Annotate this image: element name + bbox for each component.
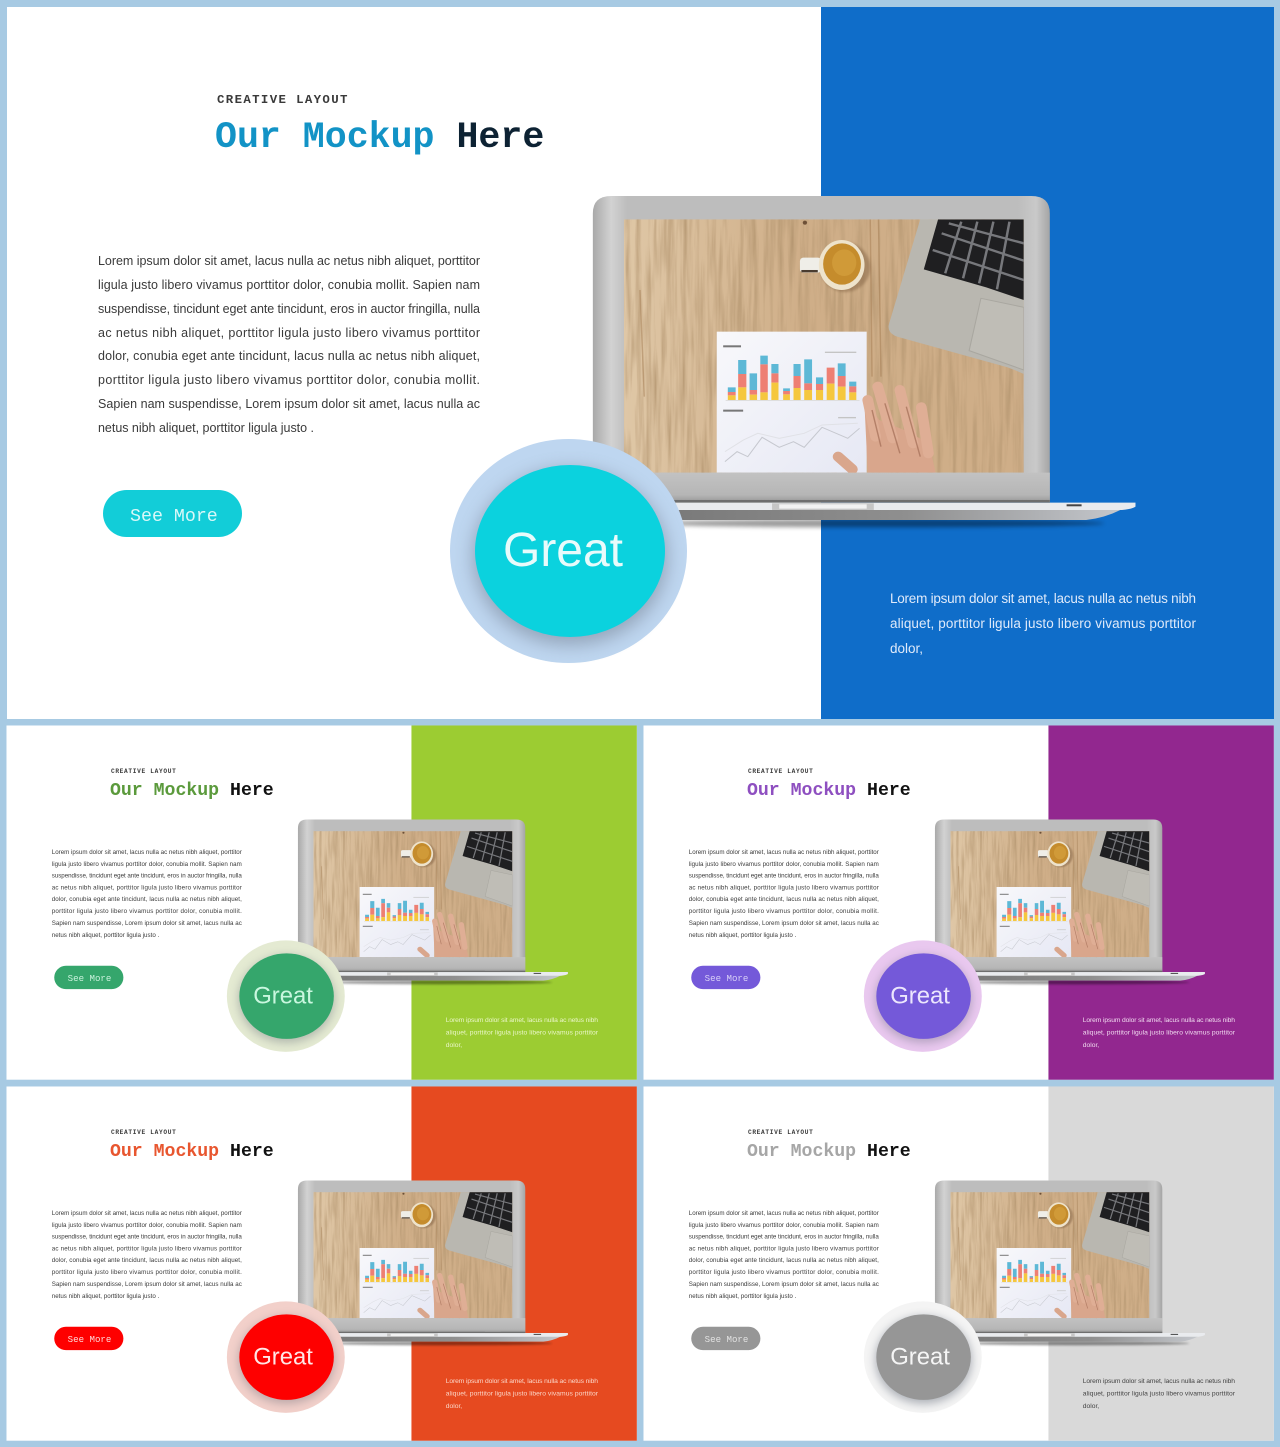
body paragraph: Lorem ipsum dolor sit amet, lacus nulla ac netus nibh aliquet, porttitor [98, 254, 480, 268]
eyebrow label: CREATIVE LAYOUT [748, 768, 813, 775]
body paragraph: ac netus nibh aliquet, porttitor ligula justo libero vivamus porttitor [689, 1246, 879, 1253]
body paragraph: ligula justo libero vivamus porttitor dolor, conubia mollit. Sapien nam [98, 278, 480, 292]
button: see more: See More [130, 507, 218, 527]
panel caption: Lorem ipsum dolor sit amet, lacus nulla ac netus nibh [1083, 1017, 1235, 1024]
panel caption: dolor, [1083, 1403, 1099, 1410]
panel caption: aliquet, porttitor ligula justo libero vivamus porttitor [446, 1390, 599, 1397]
body paragraph: Lorem ipsum dolor sit amet, lacus nulla ac netus nibh aliquet, porttitor [52, 849, 242, 856]
panel caption [1083, 1378, 1236, 1410]
body paragraph: Sapien nam suspendisse, Lorem ipsum dolor sit amet, lacus nulla ac [689, 1281, 879, 1288]
body paragraph: porttitor ligula justo libero vivamus porttitor dolor, conubia mollit. [689, 908, 879, 915]
badge: great: Great [503, 524, 623, 577]
panel caption [446, 1378, 599, 1410]
body paragraph: Sapien nam suspendisse, Lorem ipsum dolor sit amet, lacus nulla ac [689, 920, 879, 927]
laptop mockup [935, 820, 1205, 984]
button: see more [54, 1327, 123, 1350]
laptop mockup [593, 196, 1135, 527]
badge: great [450, 439, 687, 663]
body paragraph: porttitor ligula justo libero vivamus porttitor dolor, conubia mollit. [689, 1269, 879, 1276]
body paragraph: ac netus nibh aliquet, porttitor ligula justo libero vivamus porttitor [98, 326, 480, 340]
body paragraph: suspendisse, tincidunt eget ante tincidunt, eros in auctor fringilla, nulla [98, 302, 480, 316]
laptop mockup [935, 1181, 1205, 1345]
right colour panel [411, 725, 637, 1080]
panel caption: aliquet, porttitor ligula justo libero vivamus porttitor [890, 616, 1196, 631]
panel caption: aliquet, porttitor ligula justo libero vivamus porttitor [1083, 1390, 1236, 1397]
title: Our Mockup Here [110, 1142, 274, 1162]
body paragraph [689, 1210, 879, 1300]
button: see more [54, 966, 123, 989]
panel: large blue slide [7, 7, 1274, 719]
badge: great [227, 940, 345, 1052]
badge: great: Great [253, 1344, 313, 1371]
title: Our Mockup Here [110, 781, 274, 801]
laptop mockup [298, 820, 568, 984]
button: see more [691, 1327, 760, 1350]
body paragraph: ligula justo libero vivamus porttitor dolor, conubia mollit. Sapien nam [52, 861, 242, 868]
badge: great [227, 1301, 345, 1413]
eyebrow label: CREATIVE LAYOUT [217, 93, 349, 107]
eyebrow label: CREATIVE LAYOUT [748, 1129, 813, 1136]
button: see more [691, 966, 760, 989]
body paragraph: ac netus nibh aliquet, porttitor ligula justo libero vivamus porttitor [689, 885, 879, 892]
badge: great: Great [253, 983, 313, 1010]
panel caption [1083, 1017, 1236, 1049]
eyebrow label: CREATIVE LAYOUT [111, 768, 176, 775]
body paragraph [52, 849, 242, 939]
eyebrow label: CREATIVE LAYOUT [111, 1129, 176, 1136]
body paragraph: ac netus nibh aliquet, porttitor ligula justo libero vivamus porttitor [52, 1246, 242, 1253]
title: Our Mockup Here [747, 781, 911, 801]
body paragraph: netus nibh aliquet, porttitor ligula justo . [52, 932, 159, 939]
badge: great [864, 940, 982, 1052]
body paragraph [689, 849, 879, 939]
button: see more: See More [705, 973, 748, 984]
body paragraph [52, 1210, 242, 1300]
body paragraph: ligula justo libero vivamus porttitor dolor, conubia mollit. Sapien nam [52, 1222, 242, 1229]
panel: green slide [6, 725, 637, 1080]
badge: great: Great [890, 1344, 950, 1371]
panel caption: Lorem ipsum dolor sit amet, lacus nulla ac netus nibh [890, 591, 1196, 606]
body paragraph: dolor, conubia eget ante tincidunt, lacus nulla ac netus nibh aliquet, [52, 1257, 242, 1264]
body paragraph: Sapien nam suspendisse, Lorem ipsum dolor sit amet, lacus nulla ac [98, 397, 480, 411]
body paragraph: Sapien nam suspendisse, Lorem ipsum dolor sit amet, lacus nulla ac [52, 1281, 242, 1288]
body paragraph: dolor, conubia eget ante tincidunt, lacus nulla ac netus nibh aliquet, [689, 896, 879, 903]
panel caption: dolor, [446, 1042, 462, 1049]
body paragraph: Sapien nam suspendisse, Lorem ipsum dolor sit amet, lacus nulla ac [52, 920, 242, 927]
button: see more [103, 490, 242, 537]
right colour panel [1048, 1086, 1274, 1441]
panel caption: aliquet, porttitor ligula justo libero vivamus porttitor [446, 1029, 599, 1036]
body paragraph: porttitor ligula justo libero vivamus porttitor dolor, conubia mollit. [52, 908, 242, 915]
body paragraph: suspendisse, tincidunt eget ante tincidunt, eros in auctor fringilla, nulla [689, 1234, 879, 1241]
panel caption: dolor, [446, 1403, 462, 1410]
button: see more: See More [68, 1334, 111, 1345]
button: see more: See More [68, 973, 111, 984]
body paragraph: ligula justo libero vivamus porttitor dolor, conubia mollit. Sapien nam [689, 1222, 879, 1229]
button: see more: See More [705, 1334, 748, 1345]
badge: great: Great [890, 983, 950, 1010]
panel caption [446, 1017, 599, 1049]
panel caption: dolor, [890, 641, 923, 656]
body paragraph: suspendisse, tincidunt eget ante tincidunt, eros in auctor fringilla, nulla [52, 1234, 242, 1241]
title: Our Mockup Here [747, 1142, 911, 1162]
body paragraph: ligula justo libero vivamus porttitor dolor, conubia mollit. Sapien nam [689, 861, 879, 868]
title: Our Mockup Here [215, 117, 544, 158]
panel caption: Lorem ipsum dolor sit amet, lacus nulla ac netus nibh [446, 1378, 598, 1385]
body paragraph: dolor, conubia eget ante tincidunt, lacus nulla ac netus nibh aliquet, [98, 349, 480, 363]
panel: red slide [6, 1086, 637, 1441]
body paragraph: porttitor ligula justo libero vivamus porttitor dolor, conubia mollit. [52, 1269, 242, 1276]
body paragraph: netus nibh aliquet, porttitor ligula justo . [689, 1293, 796, 1300]
body paragraph: netus nibh aliquet, porttitor ligula justo . [689, 932, 796, 939]
laptop mockup [298, 1181, 568, 1345]
panel caption [890, 591, 1196, 656]
body paragraph: porttitor ligula justo libero vivamus porttitor dolor, conubia mollit. [98, 373, 480, 387]
body paragraph: dolor, conubia eget ante tincidunt, lacus nulla ac netus nibh aliquet, [689, 1257, 879, 1264]
panel caption: aliquet, porttitor ligula justo libero vivamus porttitor [1083, 1029, 1236, 1036]
right colour panel [821, 7, 1274, 719]
panel: grey slide [643, 1086, 1274, 1441]
panel caption: Lorem ipsum dolor sit amet, lacus nulla ac netus nibh [1083, 1378, 1235, 1385]
body paragraph [98, 254, 480, 435]
body paragraph: Lorem ipsum dolor sit amet, lacus nulla ac netus nibh aliquet, porttitor [689, 849, 879, 856]
panel caption: dolor, [1083, 1042, 1099, 1049]
body paragraph: ac netus nibh aliquet, porttitor ligula justo libero vivamus porttitor [52, 885, 242, 892]
body paragraph: suspendisse, tincidunt eget ante tincidunt, eros in auctor fringilla, nulla [52, 873, 242, 880]
panel caption: Lorem ipsum dolor sit amet, lacus nulla ac netus nibh [446, 1017, 598, 1024]
body paragraph: Lorem ipsum dolor sit amet, lacus nulla ac netus nibh aliquet, porttitor [52, 1210, 242, 1217]
right colour panel [1048, 725, 1274, 1080]
body paragraph: netus nibh aliquet, porttitor ligula justo . [98, 421, 314, 435]
right colour panel [411, 1086, 637, 1441]
badge: great [864, 1301, 982, 1413]
panel: purple slide [643, 725, 1274, 1080]
body paragraph: dolor, conubia eget ante tincidunt, lacus nulla ac netus nibh aliquet, [52, 896, 242, 903]
body paragraph: suspendisse, tincidunt eget ante tincidunt, eros in auctor fringilla, nulla [689, 873, 879, 880]
body paragraph: netus nibh aliquet, porttitor ligula justo . [52, 1293, 159, 1300]
body paragraph: Lorem ipsum dolor sit amet, lacus nulla ac netus nibh aliquet, porttitor [689, 1210, 879, 1217]
